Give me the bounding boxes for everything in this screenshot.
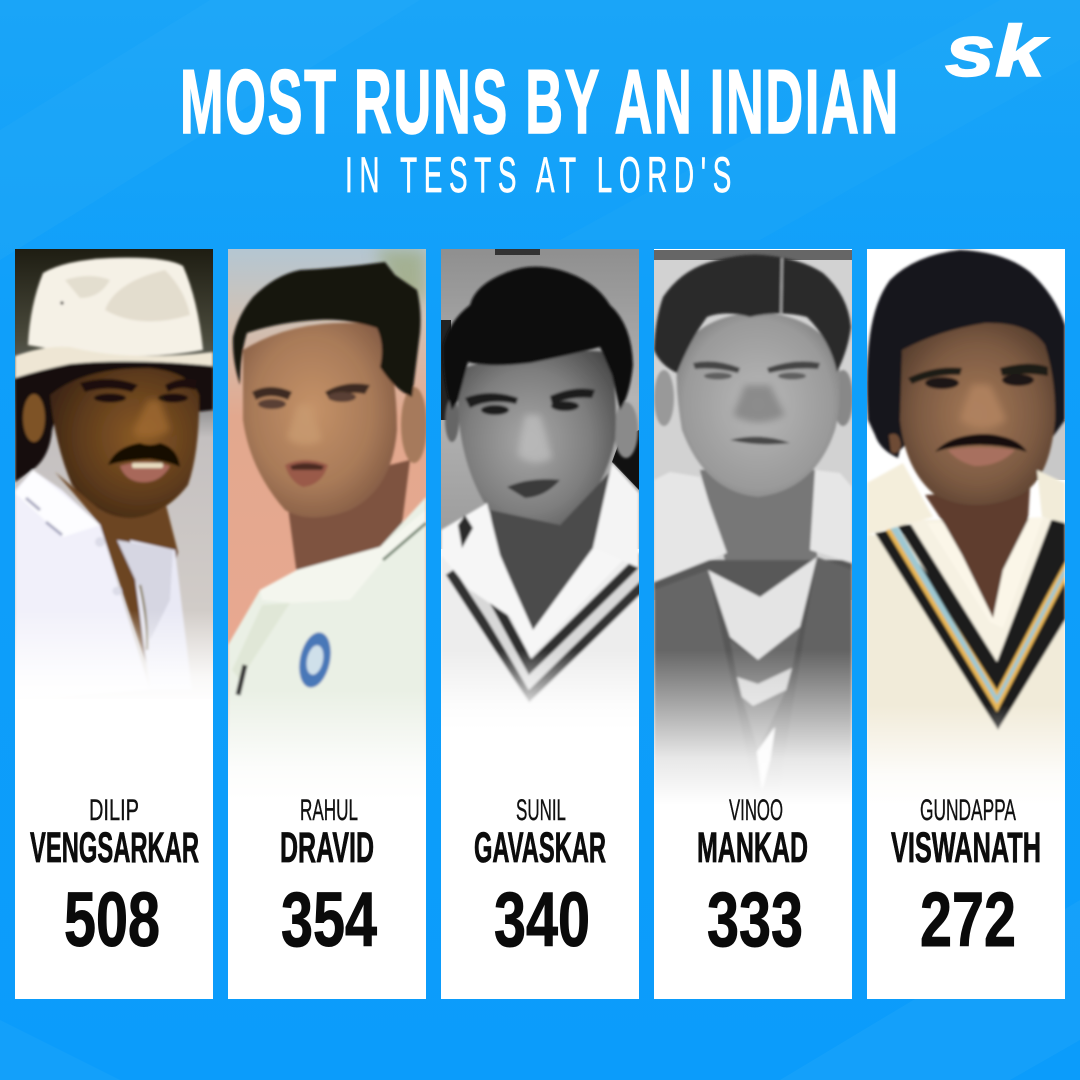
portrait: Dravid [228, 249, 426, 764]
name: RAHUL [300, 794, 358, 827]
runs: 272: 272 [920, 877, 1016, 963]
name: GAVASKAR [474, 824, 606, 872]
name: DRAVID [280, 824, 374, 872]
panel: Rahul Dravid [228, 249, 427, 999]
name [280, 794, 374, 872]
panel: Gundappa Viswanath [867, 249, 1065, 999]
name [891, 794, 1041, 872]
panel: Dilip Vengsarkar [15, 249, 213, 999]
logo: sk: sk [945, 12, 1050, 92]
name: VINOO [729, 794, 783, 827]
name: VENGSARKAR [30, 824, 199, 872]
runs: 333: 333 [707, 877, 803, 963]
name [697, 794, 808, 872]
fade [228, 705, 426, 800]
name [30, 794, 199, 872]
name [474, 794, 606, 872]
runs: 508: 508 [64, 877, 160, 963]
portrait: Gavaskar [441, 249, 639, 703]
subtitle: IN TESTS AT LORD'S [345, 147, 738, 203]
fade [15, 610, 213, 705]
runs: 354: 354 [281, 877, 377, 963]
runs: 340: 340 [494, 877, 590, 963]
portrait: Mankad [654, 250, 853, 835]
fade [441, 650, 639, 730]
portrait: Viswanath [867, 249, 1065, 770]
fade [867, 705, 1065, 805]
name: DILIP [89, 794, 139, 827]
portrait: Vengsarkar [15, 249, 213, 676]
fade [654, 650, 852, 805]
name: SUNIL [516, 794, 566, 827]
panel: Vinoo Mankad [654, 249, 853, 999]
panel: Sunil Gavaskar [441, 249, 650, 999]
name: MANKAD [697, 824, 808, 872]
